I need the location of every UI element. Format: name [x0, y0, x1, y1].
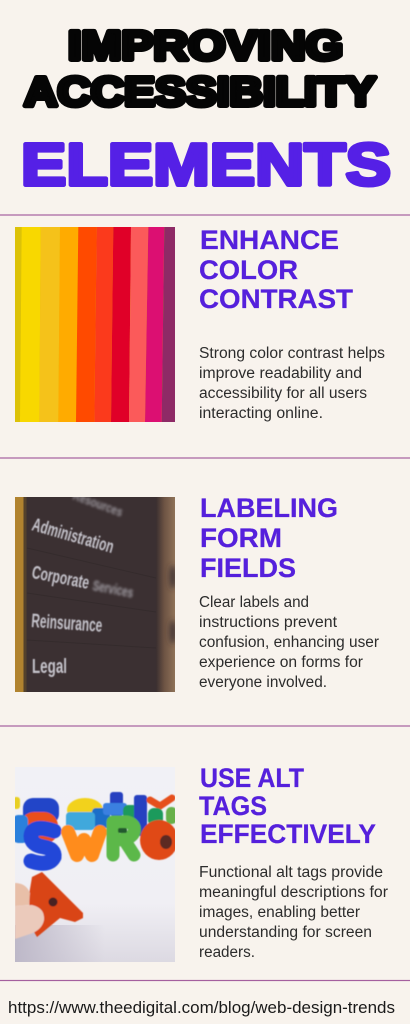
text: color contrast description: Strong color contrast helps — [199, 345, 385, 362]
text: alt tags description: understanding for screen — [199, 924, 372, 941]
text: color contrast description — [199, 345, 385, 422]
heading: labeling form fields: FORM — [200, 523, 282, 553]
text: form fields description: instructions prevent — [199, 614, 338, 631]
text: alt tags description: meaningful descriptions for — [199, 884, 388, 901]
photo: blurred directory sign: Services — [91, 577, 135, 602]
heading: enhance color contrast — [199, 225, 354, 314]
heading: use alt tags effectively: TAGS — [199, 791, 267, 821]
source url: https://www.theedigital.com/blog/web-design-trends — [8, 999, 395, 1017]
title: ELEMENTS — [21, 132, 391, 198]
heading: labeling form fields: LABELING — [200, 493, 338, 523]
heading: enhance color contrast: CONTRAST — [199, 284, 354, 314]
text: form fields description: everyone involved. — [199, 674, 327, 691]
heading: labeling form fields — [200, 493, 338, 583]
heading: use alt tags effectively — [199, 763, 376, 849]
text: alt tags description: readers. — [199, 944, 255, 961]
photo: blurred directory sign: Corporate — [30, 562, 91, 593]
text: form fields description: confusion, enhancing user — [199, 634, 379, 651]
text: alt tags description: Functional alt tags provide — [199, 864, 383, 881]
heading: use alt tags effectively: USE ALT — [200, 763, 304, 793]
photo: blurred directory sign: Resources — [71, 488, 125, 520]
title: ACCESSIBILITY — [24, 68, 376, 114]
text: color contrast description: accessibility for all users — [199, 385, 367, 402]
photo: blurred directory sign: Legal — [32, 656, 67, 678]
heading: labeling form fields: FIELDS — [200, 553, 296, 583]
heading: enhance color contrast: ENHANCE — [200, 225, 339, 255]
title — [21, 22, 391, 198]
text: color contrast description: interacting online. — [199, 405, 323, 422]
text: color contrast description: improve readability and — [199, 365, 362, 382]
text: alt tags description: images, enabling better — [199, 904, 360, 921]
photo: foam letters — [13, 767, 178, 962]
text: form fields description: experience on forms for — [199, 654, 363, 671]
photo: blurred directory sign: Administration — [30, 515, 116, 557]
title: IMPROVING — [68, 22, 343, 68]
text: alt tags description — [199, 864, 388, 961]
heading: enhance color contrast: COLOR — [199, 255, 298, 285]
heading: use alt tags effectively: EFFECTIVELY — [200, 819, 376, 849]
photo: blurred directory sign — [15, 488, 176, 692]
photo: colour strips — [15, 227, 175, 422]
text: form fields description: Clear labels and — [199, 594, 309, 611]
photo: blurred directory sign: Reinsurance — [31, 611, 103, 637]
text: form fields description — [199, 594, 379, 691]
